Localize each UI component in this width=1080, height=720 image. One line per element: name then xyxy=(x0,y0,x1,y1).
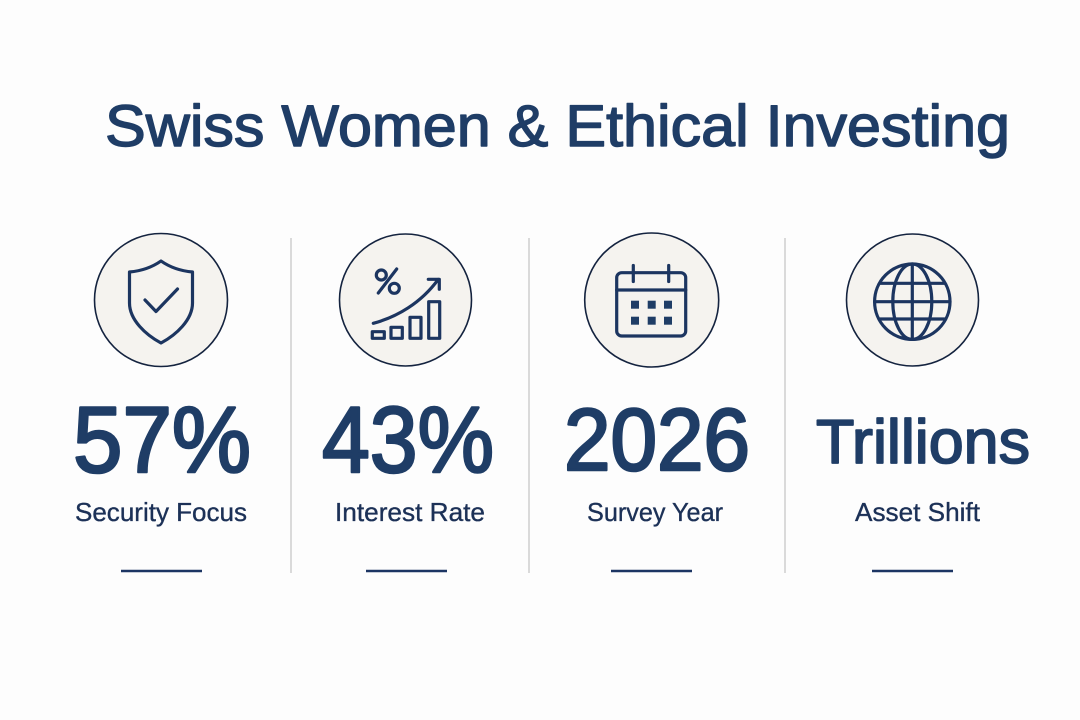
panel: interest rate xyxy=(322,234,494,571)
label: survey year: Survey Year xyxy=(587,497,723,527)
label: interest rate: Interest Rate xyxy=(335,497,485,527)
panel: survey year xyxy=(564,233,750,571)
icon: shield with check xyxy=(94,234,228,366)
icon: percent with rising bars xyxy=(340,234,472,366)
panel: asset shift xyxy=(816,234,1030,571)
icon: globe xyxy=(846,234,978,366)
title: Swiss Women & Ethical Investing xyxy=(105,94,1010,159)
icon: calendar xyxy=(585,233,719,367)
stat: 2026: 2026 xyxy=(564,390,750,489)
stat: trillions: Trillions xyxy=(816,408,1030,477)
stat: 57%: 57% xyxy=(73,387,251,492)
panel: security focus xyxy=(73,234,251,571)
label: security focus: Security Focus xyxy=(75,497,247,527)
stat: 43%: 43% xyxy=(322,387,494,492)
label: asset shift: Asset Shift xyxy=(855,497,981,527)
